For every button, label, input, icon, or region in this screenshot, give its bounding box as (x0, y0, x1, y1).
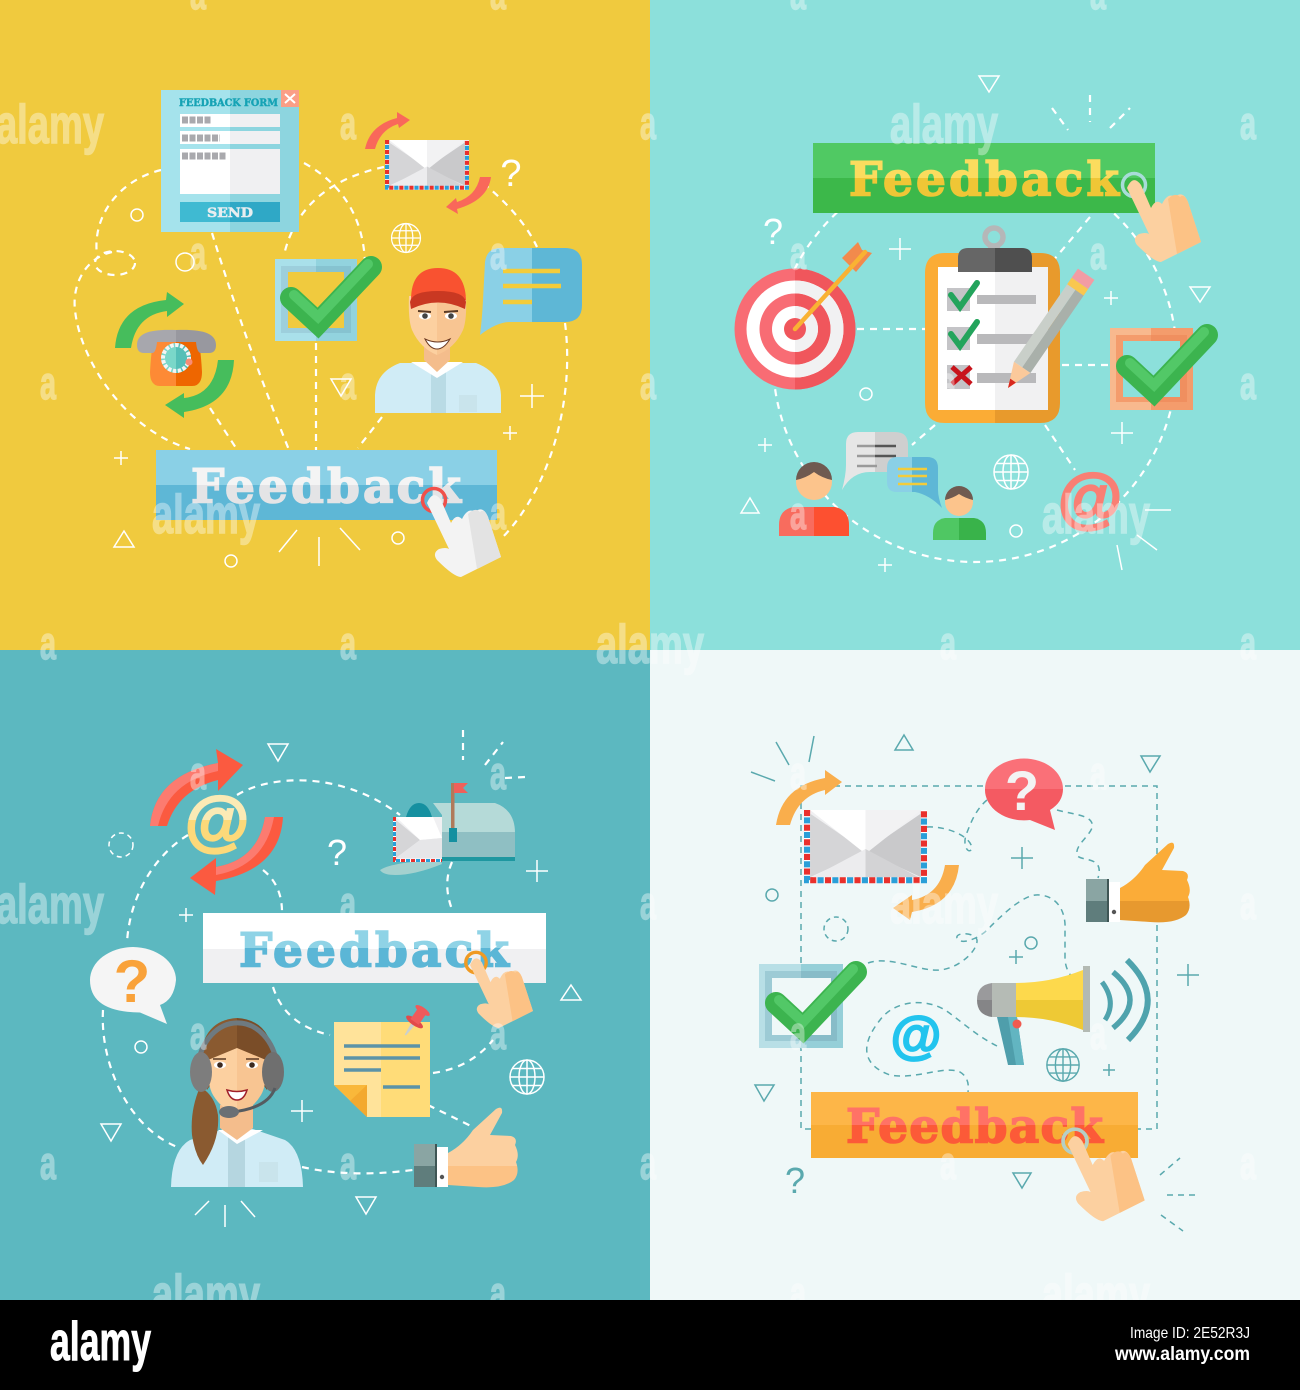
dashed connector network (801, 786, 1195, 1231)
man with red cap (375, 268, 501, 413)
icon: checkbox with green tick (759, 964, 856, 1048)
watermarks: a (790, 227, 806, 279)
watermarks: a (1090, 747, 1106, 799)
banner: Feedback: Feedback (191, 460, 462, 514)
banner: Feedback (811, 1092, 1138, 1158)
icon: pointing hand (1063, 1129, 1145, 1221)
banner: Feedback (203, 913, 546, 983)
question mark: ? (327, 832, 347, 873)
woman with headset (171, 1018, 303, 1187)
watermarks: a (790, 487, 806, 539)
watermarks: a (490, 1007, 506, 1059)
speech bubble: question: ? (1005, 759, 1039, 822)
watermarks: a (1240, 877, 1256, 929)
watermarks: a (40, 357, 56, 409)
icon: target with arrow (734, 242, 872, 390)
watermarks: a (190, 747, 206, 799)
watermarks: alamy (1042, 483, 1150, 545)
watermarks: a (1240, 357, 1256, 409)
speech bubble: question (90, 947, 176, 1024)
speech bubble: question: ? (114, 948, 150, 1015)
icon: globe (1047, 1049, 1079, 1081)
watermarks: a (790, 1267, 806, 1319)
watermarks: a (490, 747, 506, 799)
watermarks: a (490, 1267, 506, 1319)
at sign: @ (185, 783, 249, 857)
speech bubble (480, 248, 582, 335)
decorative shapes (741, 76, 1210, 572)
watermarks: alamy (152, 483, 260, 545)
watermarks: a (940, 617, 956, 669)
watermarks: a (490, 227, 506, 279)
panel: yellow feedback form scene (0, 0, 650, 650)
feedback form: SEND (207, 206, 253, 221)
footer logo: alamy (50, 1310, 151, 1372)
icon: megaphone with sound waves (977, 960, 1148, 1065)
watermarks: a (190, 1007, 206, 1059)
footer bar (0, 1300, 1300, 1390)
panel: pale megaphone scene (650, 650, 1300, 1300)
decorative shapes (751, 735, 1199, 1188)
watermarks: a (1240, 1137, 1256, 1189)
watermarks: a (640, 357, 656, 409)
watermarks: alamy (890, 873, 998, 935)
at sign: @ (891, 1007, 941, 1065)
icon: envelope with orange arrows (776, 770, 959, 920)
icon: pointing hand (1122, 174, 1201, 262)
watermarks: a (790, 1007, 806, 1059)
watermarks: alamy (890, 93, 998, 155)
banner: Feedback: Feedback (849, 152, 1120, 208)
watermarks: a (490, 487, 506, 539)
decorative shapes (101, 744, 581, 1227)
watermarks: alamy (1042, 1263, 1150, 1325)
watermarks: a (340, 617, 356, 669)
icon: envelope with refresh arrows (365, 112, 491, 214)
question mark: ? (785, 1160, 805, 1201)
banner: Feedback: Feedback (846, 1100, 1104, 1154)
watermarks: a (1240, 617, 1256, 669)
watermarks: a (1090, 1007, 1106, 1059)
icon: pointing hand (466, 952, 533, 1028)
at sign: @ (1058, 460, 1122, 534)
icon: thumbs up hand (414, 1108, 518, 1187)
watermarks: a (340, 1137, 356, 1189)
watermarks: alamy (596, 613, 704, 675)
speech bubble: question (985, 758, 1063, 830)
sticky note with pin (334, 1002, 433, 1117)
watermarks: a (40, 1137, 56, 1189)
watermarks: a (640, 1137, 656, 1189)
icon: globe (510, 1060, 544, 1094)
icon: checkbox with green tick (275, 259, 371, 341)
dashed connector network (75, 163, 567, 540)
watermarks: alamy (0, 93, 104, 155)
icon: pointing hand (422, 488, 501, 577)
banner: Feedback: Feedback (239, 924, 510, 978)
dashed connector network (103, 730, 525, 1173)
banner: Feedback (813, 143, 1155, 213)
watermarks: a (940, 357, 956, 409)
question mark: ? (763, 211, 783, 252)
watermarks: a (340, 877, 356, 929)
feedback form: FEEDBACK FORM (179, 98, 278, 109)
watermarks: alamy (152, 1263, 260, 1325)
icon: mailbox with envelope (380, 783, 515, 875)
icon: telephone with green arrows (115, 292, 234, 418)
icon: orange thumbs up hand (1086, 843, 1190, 922)
watermarks: alamy (0, 873, 104, 935)
decorative shapes (114, 209, 544, 567)
watermarks: a (640, 877, 656, 929)
watermarks: a (640, 97, 656, 149)
watermarks: a (40, 617, 56, 669)
watermarks: a (340, 357, 356, 409)
feedback form (161, 90, 299, 232)
icon: clipboard checklist (925, 228, 1094, 423)
people talking (779, 432, 986, 540)
banner: Feedback (156, 450, 497, 520)
dashed connector network (773, 95, 1177, 562)
icon: pencil (1000, 269, 1094, 394)
icon: red refresh arrows (150, 749, 283, 895)
icon: globe (392, 224, 420, 252)
icon: checkbox with green tick (1110, 328, 1207, 410)
watermarks: a (1090, 227, 1106, 279)
panel: turquoise checklist scene (650, 0, 1300, 650)
image id: Image ID: 2E52R3J (1130, 1325, 1250, 1342)
website: www.alamy.com (1114, 1344, 1250, 1365)
watermarks: a (940, 1137, 956, 1189)
watermarks: a (190, 227, 206, 279)
watermarks: a (1240, 97, 1256, 149)
watermarks: a (340, 97, 356, 149)
watermarks: a (790, 747, 806, 799)
question mark: ? (500, 153, 522, 195)
icon: push pin (397, 1002, 433, 1041)
icon: globe (994, 455, 1028, 489)
panel: teal support agent scene (0, 650, 650, 1300)
